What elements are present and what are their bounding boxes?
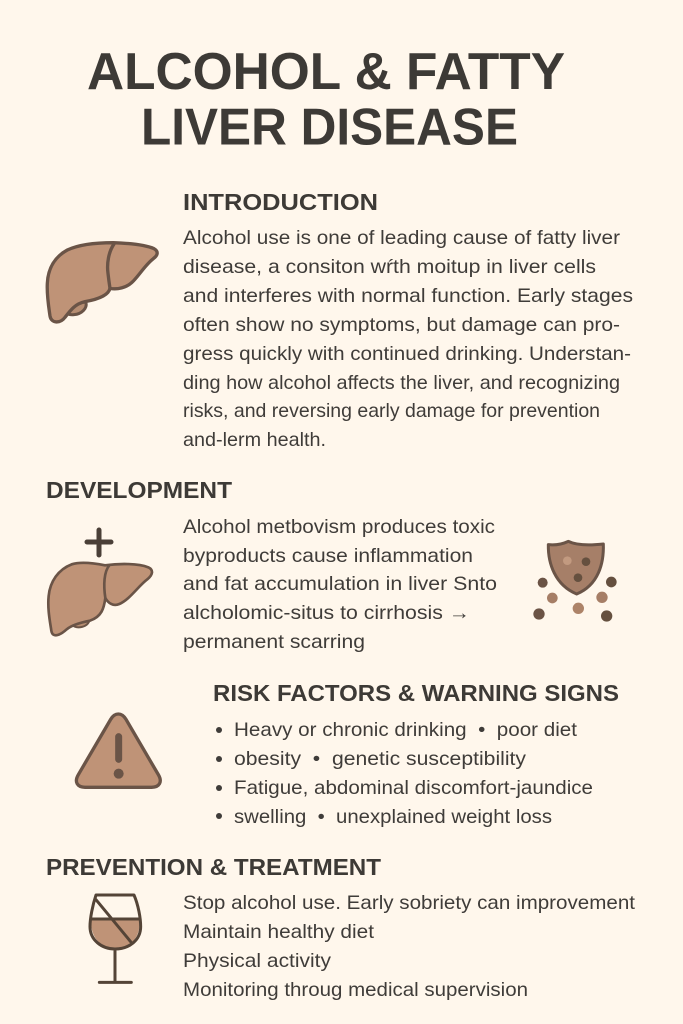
icon: liver <box>47 243 157 322</box>
panel: development <box>46 477 617 653</box>
list: risk factors: obesity • genetic susceptibility <box>234 748 526 770</box>
panel: prevention and treatment <box>46 854 636 1001</box>
text: development body: permanent scarring <box>183 631 365 653</box>
text: prevention body: Physical activity <box>183 950 331 972</box>
icon: crossed wine glass <box>90 895 141 982</box>
title <box>87 43 565 156</box>
text: introduction body: often show no symptoms, but damage can pro- <box>183 314 620 336</box>
text: introduction body: and interferes with normal function. Early stages <box>183 285 633 307</box>
list: risk factors: swelling • unexplained weight loss <box>234 806 552 828</box>
icon: liver with lobes <box>48 563 152 635</box>
text: prevention body <box>183 892 636 1001</box>
title: LIVER DISEASE <box>141 98 518 156</box>
text: introduction body: gress quickly with continued drinking. Understan- <box>183 343 631 365</box>
icon: damaged liver shield with particles <box>533 541 617 622</box>
text: development body: byproducts cause inflammation <box>183 545 473 567</box>
text: prevention body: Stop alcohol use. Early sobriety can improvement <box>183 892 636 914</box>
heading: prevention and treatment: PREVENTION & TREATMENT <box>46 854 381 880</box>
icon: plus <box>87 530 111 555</box>
icon: warning triangle <box>76 714 160 787</box>
heading: development: DEVELOPMENT <box>46 477 232 503</box>
panel: risk factors <box>76 680 619 828</box>
panel: introduction <box>47 189 633 451</box>
text: development body: and fat accumulation in liver Snto <box>183 573 497 595</box>
list: risk factors: Heavy or chronic drinking • poor diet <box>234 719 578 741</box>
list: risk factors: Fatigue, abdominal discomfort-jaundice <box>234 777 593 799</box>
text: introduction body: and-lerm health. <box>183 429 326 451</box>
text: prevention body: Monitoring throug medical supervision <box>183 979 528 1001</box>
text: development body <box>183 516 497 653</box>
heading: risk factors: RISK FACTORS & WARNING SIGNS <box>213 680 619 706</box>
text: introduction body: ding how alcohol affects the liver, and recognizing <box>183 372 620 394</box>
text: introduction body: disease, a consiton wŕth moitup in liver cells <box>183 256 596 278</box>
heading: introduction: INTRODUCTION <box>183 189 378 215</box>
text: development body: alcholomic-situs to cirrhosis → <box>183 602 470 624</box>
text: prevention body: Maintain healthy diet <box>183 921 375 943</box>
text: introduction body: risks, and reversing early damage for prevention <box>183 400 600 422</box>
list: risk factors <box>216 719 593 828</box>
text: introduction body: Alcohol use is one of leading cause of fatty liver <box>183 227 621 249</box>
title: ALCOHOL & FATTY <box>87 43 565 101</box>
text: introduction body <box>183 227 633 451</box>
text: development body: Alcohol metbovism produces toxic <box>183 516 495 538</box>
